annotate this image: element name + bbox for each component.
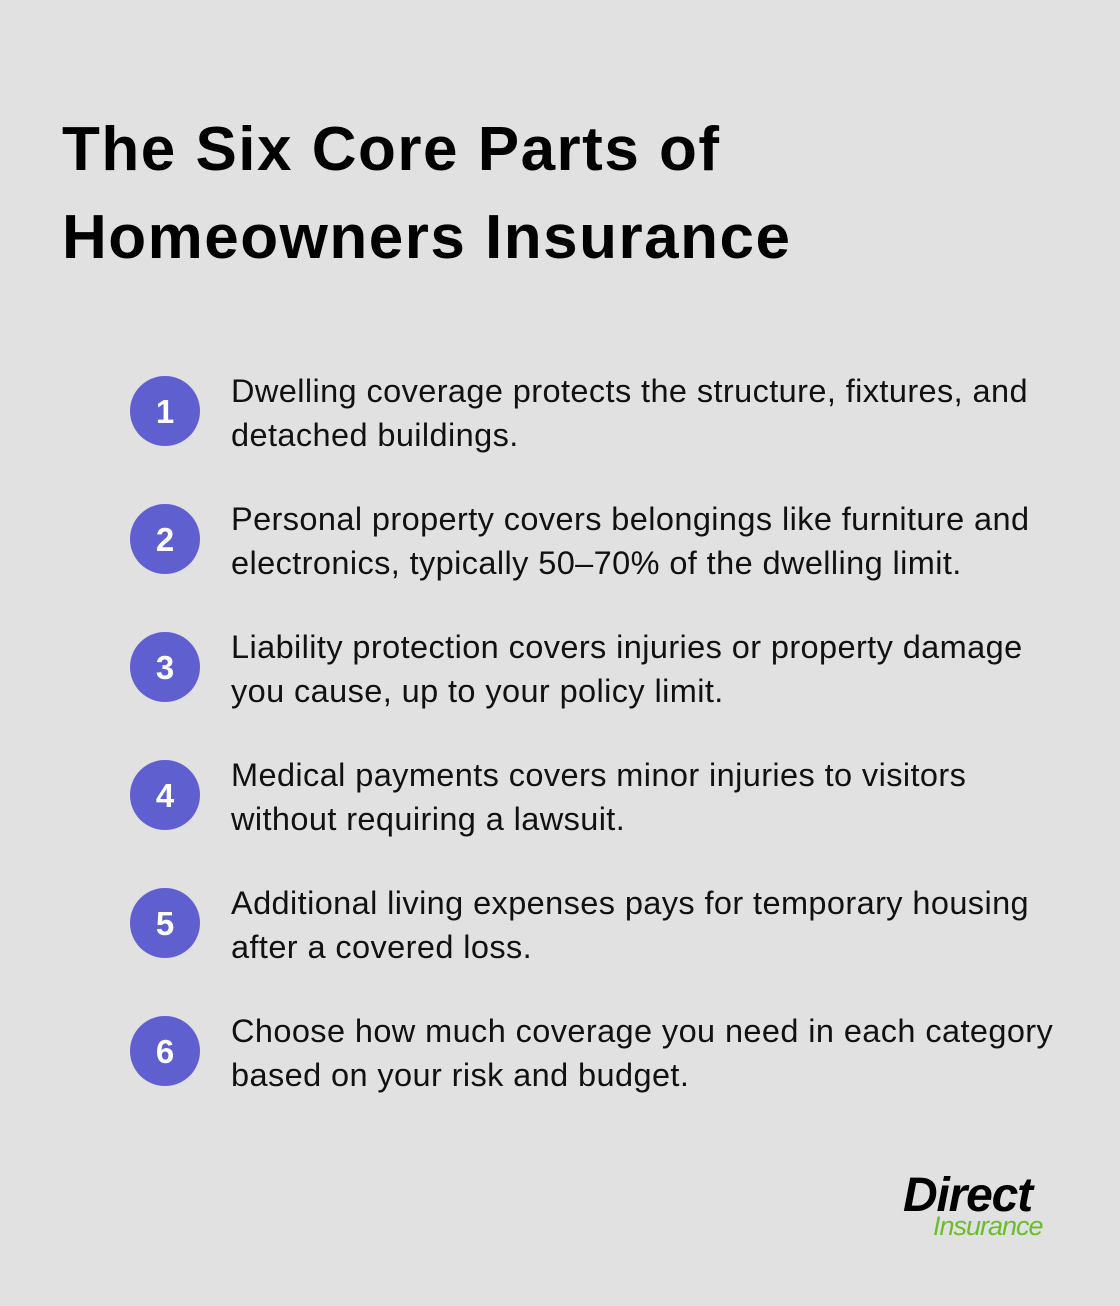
title: The Six Core Parts of — [62, 115, 721, 184]
logo — [903, 1169, 1043, 1241]
item 5: after a covered loss. — [231, 929, 532, 965]
item 6: Choose how much coverage you need in each category — [231, 1013, 1053, 1049]
item 1 — [130, 373, 1028, 453]
item 6: based on your risk and budget. — [231, 1057, 689, 1093]
item 1: Dwelling coverage protects the structure, fixtures, and — [231, 373, 1028, 409]
logo: Direct — [903, 1169, 1032, 1222]
item 6 — [130, 1013, 1053, 1093]
item 4: Medical payments covers minor injuries to visitors — [231, 757, 966, 793]
item 3: Liability protection covers injuries or property damage — [231, 629, 1023, 665]
item 5: Additional living expenses pays for temporary housing — [231, 885, 1029, 921]
title: Homeowners Insurance — [62, 203, 791, 272]
item 4 — [130, 757, 966, 837]
item 4: without requiring a lawsuit. — [231, 801, 625, 837]
title — [62, 115, 791, 272]
logo: Insurance — [933, 1211, 1043, 1241]
item 2: electronics, typically 50–70% of the dwelling limit. — [231, 545, 962, 581]
item 5 — [130, 885, 1029, 965]
item 1: detached buildings. — [231, 417, 519, 453]
item 2: 2 — [156, 521, 174, 558]
item 3: you cause, up to your policy limit. — [231, 673, 724, 709]
item 1: 1 — [156, 393, 174, 430]
item 4: 4 — [156, 777, 174, 814]
item 5: 5 — [156, 905, 174, 942]
item 2: Personal property covers belongings like furniture and — [231, 501, 1029, 537]
item 3: 3 — [156, 649, 174, 686]
item 2 — [130, 501, 1029, 581]
item 6: 6 — [156, 1033, 174, 1070]
item 3 — [130, 629, 1023, 709]
